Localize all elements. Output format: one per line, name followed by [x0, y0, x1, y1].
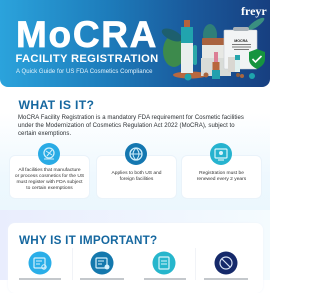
card 1: [9, 155, 90, 198]
card 1 text: All facilities that manufacture: [18, 168, 81, 173]
card 1 text: [15, 168, 84, 191]
clipboard with document: MOCRA: [234, 39, 248, 43]
tall bottle: [181, 20, 197, 73]
heading: why is it important: WHY IS IT IMPORTANT?: [19, 234, 157, 246]
title: MoCRA: [16, 14, 158, 55]
icon: prohibited: [214, 252, 238, 274]
caption 1: [19, 278, 61, 280]
column divider 1: [72, 248, 73, 280]
icon: inspection: [28, 252, 52, 274]
panel: why is it important: [8, 223, 262, 293]
jar: [201, 38, 231, 76]
card 2 text: Applies to both US and: [111, 171, 162, 176]
intro paragraph: [18, 114, 244, 137]
card 2 text: foreign facilities: [120, 177, 153, 182]
intro paragraph: certain exemptions.: [18, 131, 71, 137]
card 2: [96, 155, 177, 198]
palm leaves: [160, 16, 266, 67]
card 3 text: Registration must be: [199, 171, 244, 176]
section background: what is it: [0, 80, 270, 210]
lipstick: [212, 52, 220, 79]
icon: checklist: [152, 252, 176, 274]
shield check icon: [249, 49, 265, 69]
card 3: [181, 155, 262, 198]
card 3 text: renewed every 2 years: [197, 177, 246, 182]
truncated captions: [19, 278, 248, 280]
intro paragraph: under the Modernization of Cosmetics Regulation Act 2022 (MoCRA), subject to: [18, 123, 235, 129]
card 2 text: [111, 170, 162, 182]
card 1 text: or process cosmetics for the US: [15, 174, 84, 179]
caption 3: [144, 278, 186, 280]
product illustration: [162, 18, 265, 80]
icon: renewal monitor: [210, 143, 232, 165]
card 1 text: must register with FDA subject: [16, 180, 83, 185]
icon: globe: [125, 143, 147, 165]
logo: freyr: [241, 4, 267, 18]
column divider 2: [195, 248, 196, 280]
header banner: [0, 0, 270, 87]
caption 4: [204, 278, 248, 280]
card 1 text: to certain exemptions: [26, 186, 73, 191]
heading: what is it: WHAT IS IT?: [18, 98, 94, 112]
base plate: [173, 72, 207, 78]
caption 2: [80, 278, 124, 280]
section background: why is it important: [0, 210, 270, 280]
card 3 text: [197, 170, 246, 182]
intro paragraph: MoCRA Facility Registration is a mandatory FDA requirement for Cosmetic facilities: [18, 114, 244, 120]
icon: facility: [38, 143, 60, 165]
tagline: A Quick Guide for US FDA Cosmetics Compliance: [16, 68, 153, 74]
subtitle: FACILITY REGISTRATION: [16, 53, 159, 65]
beads: [184, 72, 255, 80]
icon: records: [90, 252, 114, 274]
